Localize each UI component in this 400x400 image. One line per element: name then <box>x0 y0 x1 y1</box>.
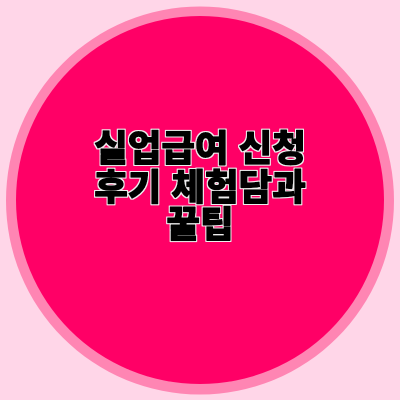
title: 후기 체험담과 <box>94 167 306 208</box>
title <box>94 128 306 245</box>
title: 실업급여 신청 <box>94 128 306 169</box>
title: 꿀팁 <box>166 204 234 245</box>
